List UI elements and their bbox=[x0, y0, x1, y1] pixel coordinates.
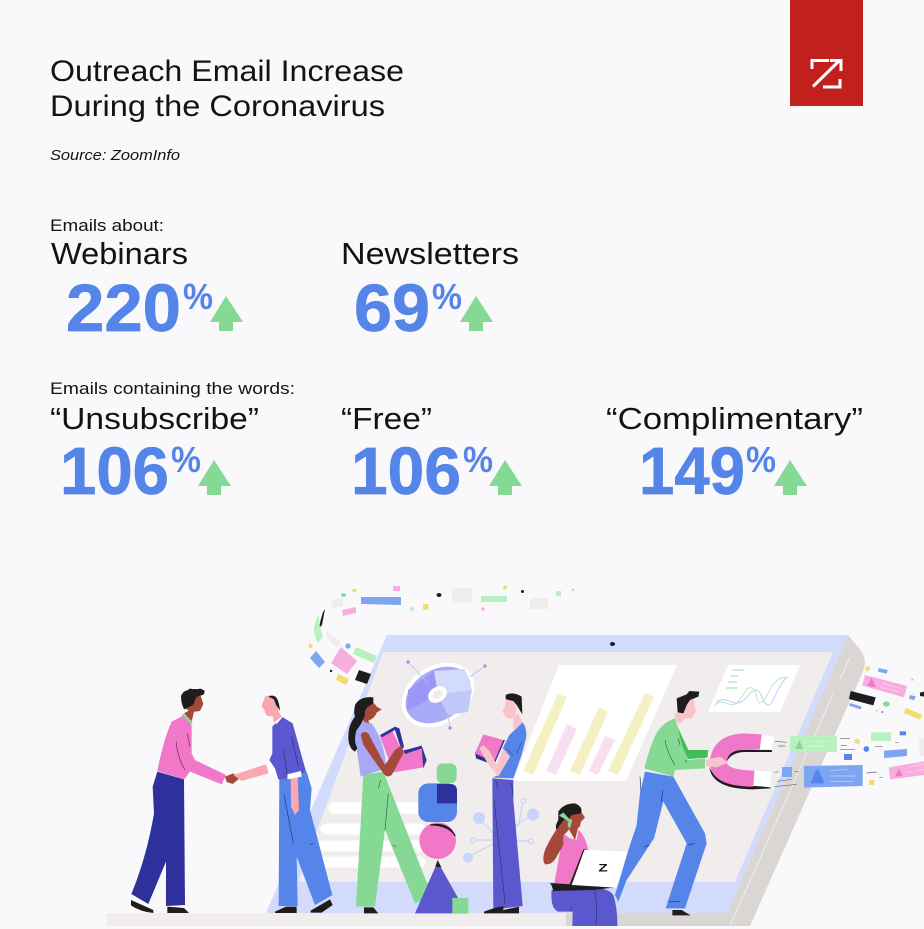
person: man pulling a magnet bbox=[615, 691, 708, 915]
title: During the Coronavirus bbox=[50, 90, 385, 123]
stat: free: “Free” bbox=[341, 401, 432, 436]
stat: free: % bbox=[463, 439, 493, 480]
logo: ZoomInfo red tab bbox=[790, 0, 863, 106]
network diagram bbox=[464, 799, 538, 862]
line chart panel bbox=[708, 665, 800, 712]
stat: newsletters bbox=[341, 236, 519, 346]
stat: webinars: Webinars bbox=[51, 236, 188, 271]
person: woman holding boxes bbox=[348, 697, 438, 913]
title: Outreach Email Increase bbox=[50, 55, 404, 88]
stat: newsletters: Newsletters bbox=[341, 236, 519, 271]
tablet device bbox=[106, 635, 865, 926]
stat: unsubscribe bbox=[50, 401, 259, 509]
stat: free bbox=[341, 401, 522, 509]
stat: complimentary: “Complimentary” bbox=[606, 401, 863, 436]
stat: newsletters: 69 bbox=[354, 271, 430, 346]
stat: newsletters: % bbox=[432, 276, 462, 317]
section label: emails containing the words: Emails containing the words: bbox=[50, 379, 295, 398]
stat: complimentary: 149 bbox=[639, 434, 745, 509]
stat: unsubscribe: “Unsubscribe” bbox=[50, 401, 259, 436]
stat: webinars: % bbox=[183, 276, 213, 317]
source line: Source: ZoomInfo bbox=[50, 147, 180, 164]
stat: complimentary bbox=[606, 401, 863, 509]
disc chart bbox=[389, 649, 487, 741]
title bbox=[50, 55, 404, 123]
stat: free: 106 bbox=[351, 434, 461, 509]
person: man holding a box bbox=[475, 693, 526, 913]
person: man in pink sweater bbox=[131, 689, 241, 913]
stat: unsubscribe: % bbox=[171, 439, 201, 480]
person: man in purple shirt bbox=[233, 695, 333, 913]
person: seated woman with laptop bbox=[543, 803, 629, 927]
person: seated woman with laptop: Z bbox=[598, 863, 608, 875]
stacked shapes bbox=[415, 763, 468, 913]
stat: webinars: 220 bbox=[66, 271, 181, 346]
blue contact card bbox=[804, 765, 863, 788]
pink contact cards bbox=[862, 675, 924, 779]
stat: complimentary: % bbox=[746, 439, 776, 480]
bar chart panel bbox=[513, 665, 677, 781]
magnet bbox=[705, 733, 774, 789]
flying contact cards bbox=[774, 666, 924, 788]
confetti swirl bbox=[308, 586, 574, 685]
illustration: team around a large tablet bbox=[106, 586, 924, 927]
section label: emails about: Emails about: bbox=[50, 216, 164, 235]
green contact card bbox=[790, 736, 837, 752]
stat: unsubscribe: 106 bbox=[60, 434, 169, 509]
stat: webinars bbox=[51, 236, 243, 346]
